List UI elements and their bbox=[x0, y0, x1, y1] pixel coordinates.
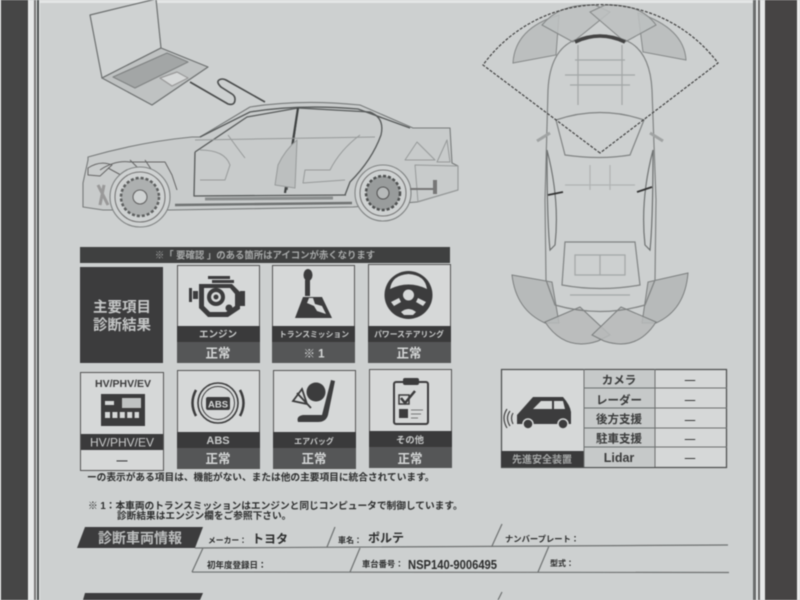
card: power steering: 正常 bbox=[396, 346, 422, 360]
safety table values: — bbox=[685, 374, 696, 386]
icon: steering wheel bbox=[384, 271, 432, 319]
footnote bbox=[88, 499, 463, 522]
camera range dashed fan bbox=[483, 5, 718, 153]
cable bbox=[190, 79, 265, 104]
card: airbag: 正常 bbox=[301, 451, 327, 466]
card: engine bbox=[177, 266, 260, 363]
card: transmission bbox=[272, 266, 355, 363]
card: other: 正常 bbox=[397, 451, 423, 466]
vehicle information fields: メーカー： bbox=[208, 536, 247, 545]
safety table labels: レーダー bbox=[596, 393, 642, 407]
card: ABS: ABS bbox=[206, 435, 230, 447]
card: engine: エンジン bbox=[199, 330, 237, 340]
icon: clipboard checklist bbox=[394, 378, 428, 424]
icon: gear shifter bbox=[295, 269, 332, 318]
car top view with sensor ranges bbox=[483, 5, 718, 344]
car body outline bbox=[83, 102, 458, 210]
vehicle information fields: NSP140-9006495 bbox=[408, 558, 497, 572]
panel: main diagnosis title: 診断結果 bbox=[93, 316, 151, 334]
heading: diagnosed vehicle information bbox=[77, 527, 203, 548]
card: engine: 正常 bbox=[205, 346, 231, 360]
card: airbag bbox=[273, 370, 356, 468]
safety table labels: カメラ bbox=[602, 374, 636, 387]
safety table labels: 駐車支援 bbox=[596, 432, 642, 446]
card: airbag: エアバッグ bbox=[294, 436, 334, 446]
vehicle information fields: ナンバープレート： bbox=[505, 534, 579, 544]
card: transmission: ※ 1 bbox=[303, 348, 325, 360]
vehicle information fields: 初年度登録日： bbox=[207, 560, 267, 570]
icon: car with sensor waves bbox=[504, 397, 571, 429]
panel: advanced safety equipment bbox=[501, 369, 727, 468]
panel: advanced safety equipment: 先進安全装置 bbox=[512, 453, 572, 466]
car top outline bbox=[537, 35, 663, 312]
card: power steering bbox=[368, 264, 451, 363]
card: transmission: トランスミッション bbox=[279, 330, 349, 339]
icon: hybrid battery unit bbox=[101, 394, 145, 426]
card: HV/PHV/EV: HV/PHV/EV bbox=[90, 436, 154, 450]
icon: laptop bbox=[90, 0, 208, 105]
vehicle information fields: トヨタ bbox=[252, 532, 288, 546]
heading: diagnosed vehicle information: 診断車両情報 bbox=[98, 530, 182, 546]
safety table labels: 後方支援 bbox=[596, 412, 642, 426]
front sensor zones bbox=[513, 5, 686, 63]
car engine bay bbox=[88, 160, 177, 205]
notice bar bbox=[80, 247, 450, 263]
footnote: 診断結果はエンジン欄をご参照下さい。 bbox=[117, 509, 291, 522]
panel: main diagnosis title bbox=[80, 267, 163, 363]
icon: engine bbox=[189, 276, 245, 317]
card: ABS: 正常 bbox=[205, 451, 231, 466]
card: HV/PHV/EV: HV/PHV/EV bbox=[95, 378, 151, 390]
car side view bbox=[83, 102, 458, 227]
safety table values: — bbox=[685, 452, 696, 464]
safety table values bbox=[685, 374, 696, 464]
safety table values: — bbox=[685, 414, 696, 426]
car interior seats bbox=[195, 135, 458, 202]
card: power steering: パワーステアリング bbox=[374, 329, 444, 339]
card: HV/PHV/EV bbox=[80, 372, 164, 470]
card: HV/PHV/EV: — bbox=[116, 455, 128, 467]
safety table labels: Lidar bbox=[604, 451, 634, 465]
card: ABS bbox=[177, 370, 260, 468]
safety table values: — bbox=[685, 433, 696, 445]
vehicle information form lines bbox=[192, 524, 729, 572]
next form separator (cropped) bbox=[498, 592, 502, 600]
front wheel bbox=[110, 167, 170, 227]
note: dash explanation: ーの表示がある項目は、機能がない、または他の主要項目に統合されています。 bbox=[87, 470, 434, 484]
next section heading (cropped) bbox=[83, 593, 203, 600]
vehicle information fields: 車名： bbox=[338, 535, 362, 545]
vehicle information fields bbox=[207, 531, 579, 572]
panel: main diagnosis title: 主要項目 bbox=[93, 298, 151, 316]
vehicle information fields: ポルテ bbox=[368, 531, 404, 545]
vehicle information fields: 型式： bbox=[550, 558, 574, 568]
safety table values: — bbox=[685, 394, 696, 406]
rear wheel bbox=[355, 165, 411, 221]
notice bar: ※「 要確認 」のある箇所はアイコンが赤くなります bbox=[155, 250, 375, 260]
safety table labels bbox=[596, 374, 642, 465]
icon: ABS warning: ABS bbox=[208, 400, 228, 410]
vehicle information fields: 車台番号： bbox=[362, 559, 404, 569]
card: other: その他 bbox=[396, 434, 425, 445]
footnote: ※ 1：本車両のトランスミッションはエンジンと同じコンピュータで制御しています。 bbox=[88, 499, 463, 512]
icon: airbag seat bbox=[293, 380, 335, 422]
car cabin and doors bbox=[175, 107, 410, 205]
card: other bbox=[369, 370, 452, 468]
rear sensor zones bbox=[512, 273, 688, 344]
